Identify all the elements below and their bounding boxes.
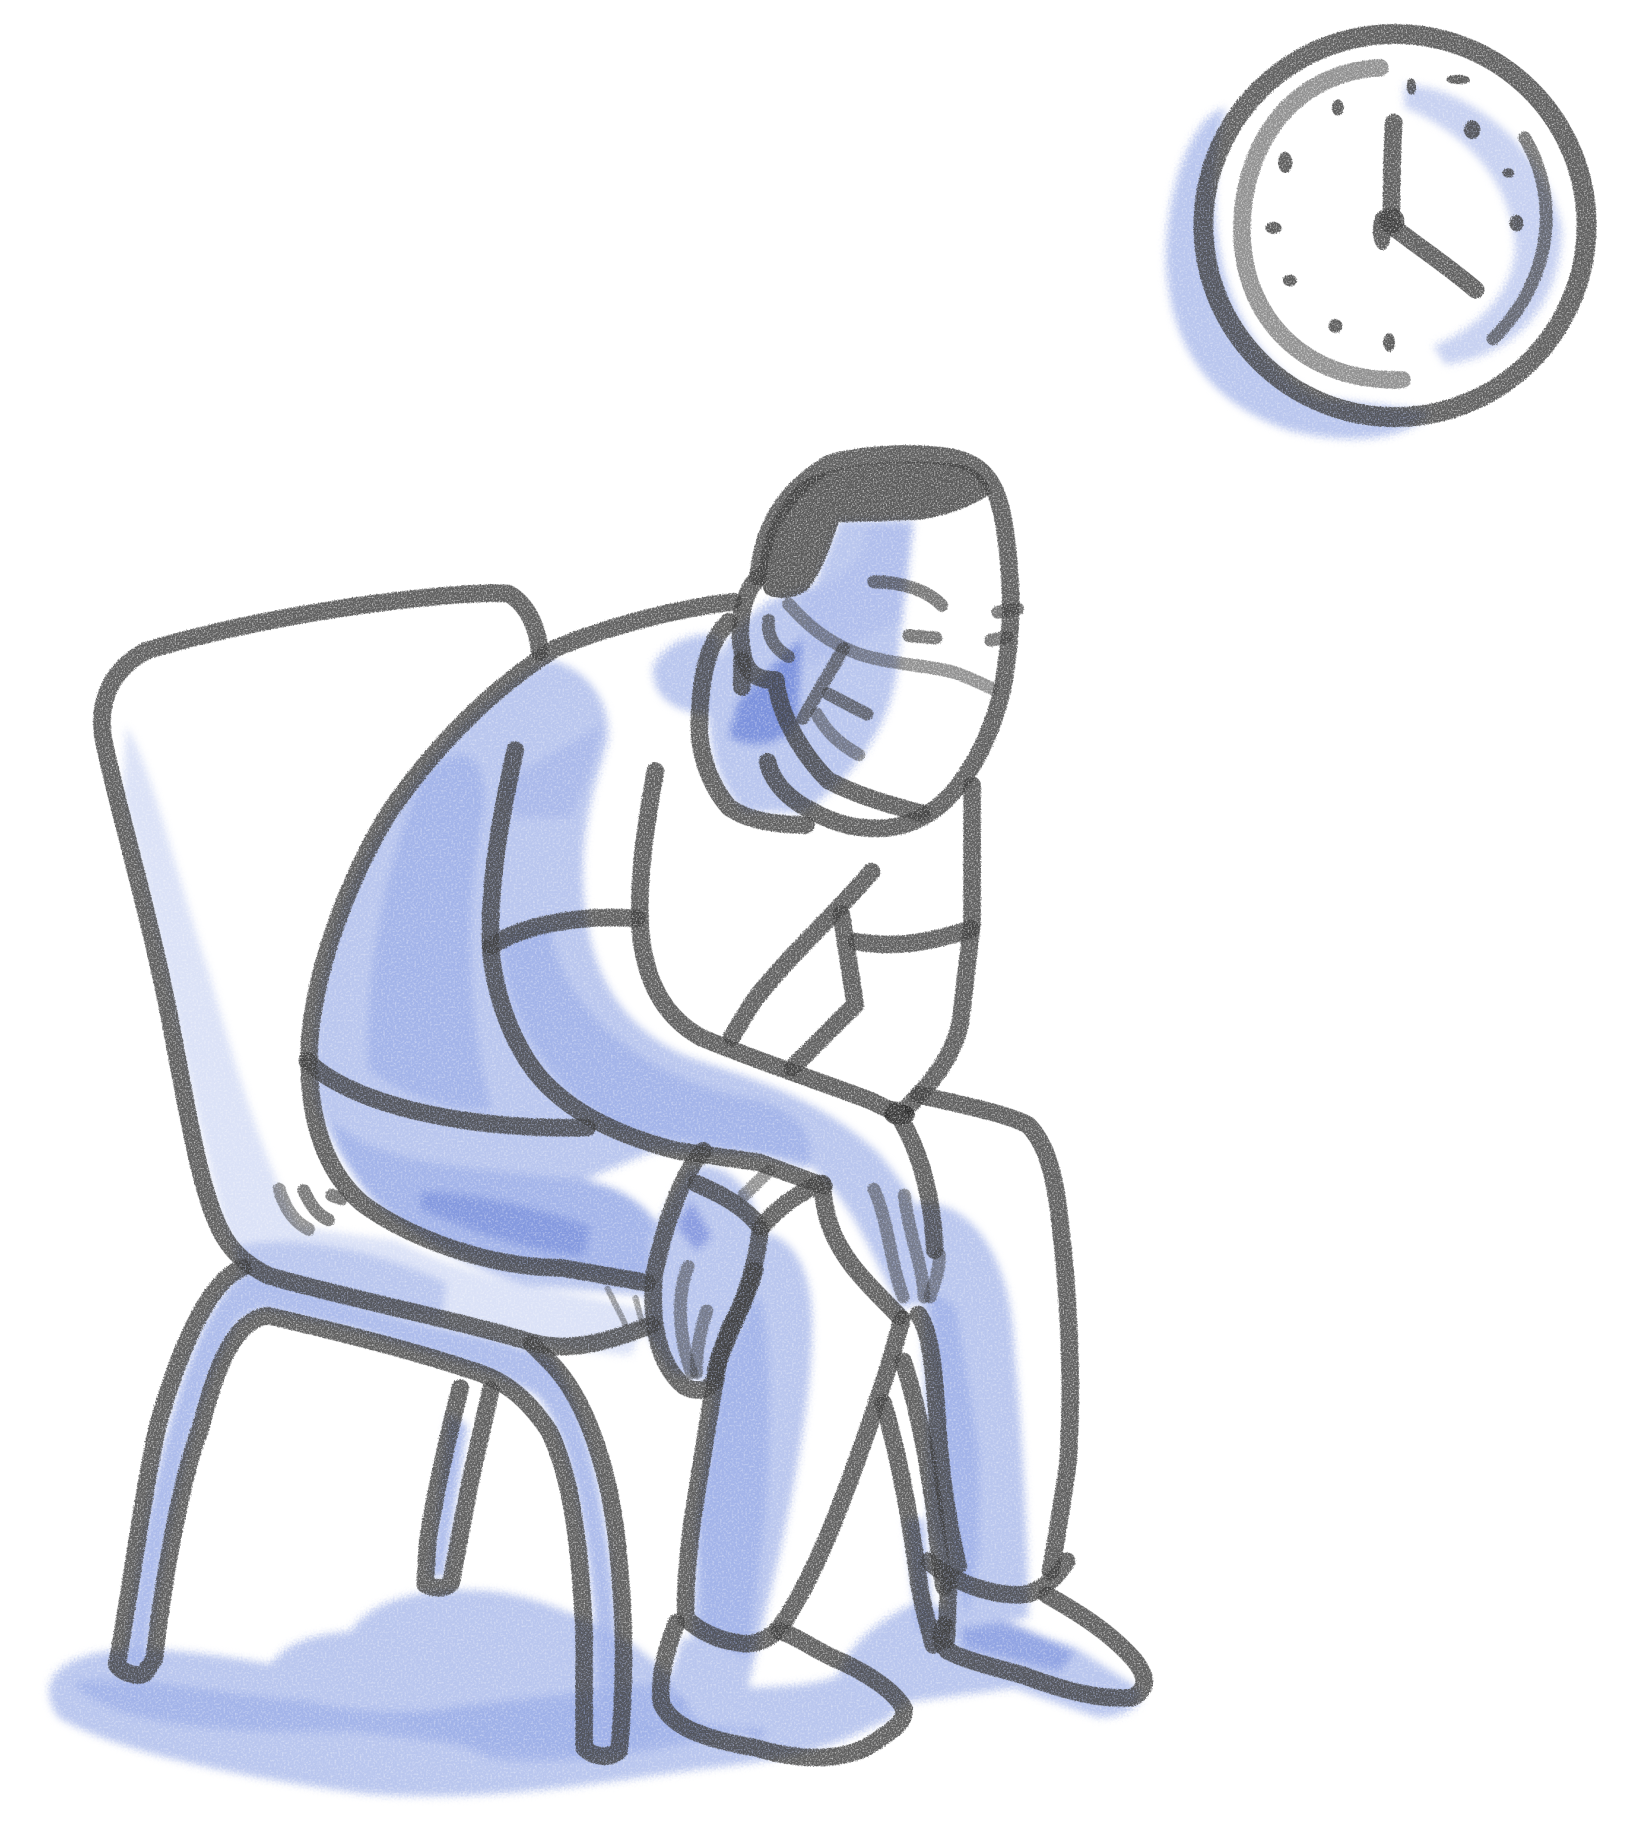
man: legs and trousers	[686, 1095, 1070, 1645]
wash: floor shadow	[49, 1590, 1140, 1796]
man: head with hair and face	[699, 454, 1018, 828]
man: torso and back	[307, 602, 972, 1283]
wash: torso and arm	[313, 660, 940, 1309]
man: shoes	[661, 1595, 1144, 1758]
chair: backrest, seat and legs	[102, 593, 652, 1756]
man: hands and knees	[653, 1110, 939, 1390]
wash: chair	[123, 727, 648, 1753]
wash: legs and hands	[646, 1166, 1028, 1688]
wash: clock	[1166, 84, 1562, 439]
wash: head and neck	[653, 520, 914, 812]
wall clock: face, ticks and hands	[1203, 34, 1587, 417]
